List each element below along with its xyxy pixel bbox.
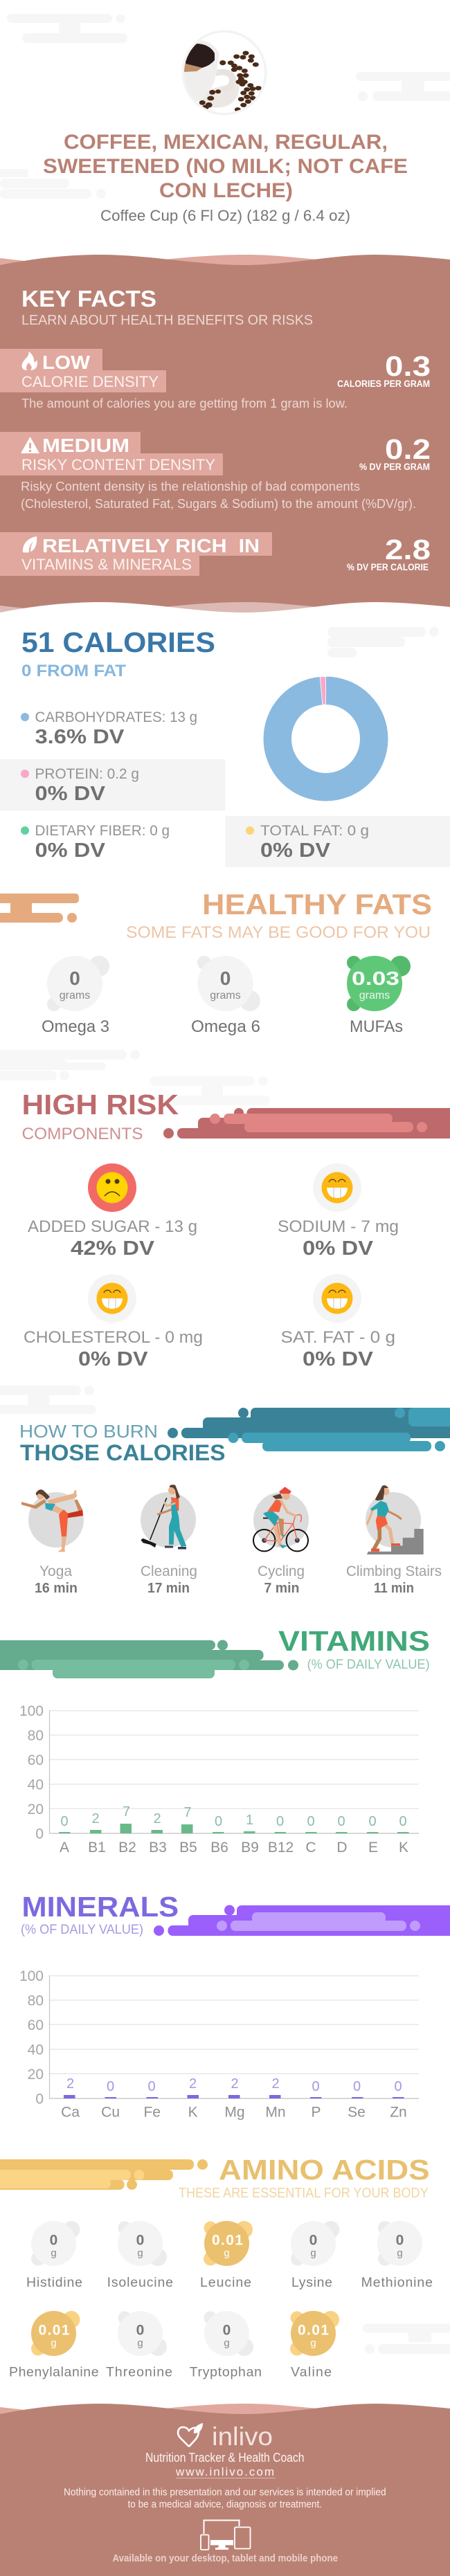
y axis labels: 0 bbox=[35, 1826, 44, 1842]
legend: total fat bbox=[226, 816, 450, 867]
y axis labels: 20 bbox=[28, 1802, 44, 1817]
risk: cholesterol bbox=[24, 1274, 203, 1370]
fat: omega 6: Omega 6 bbox=[191, 1017, 260, 1036]
x axis labels: B12 bbox=[268, 1840, 294, 1856]
amino: isoleucine: Isoleucine bbox=[107, 2275, 173, 2290]
disclaimer: Nothing contained in this presentation and our services is intended or implied bbox=[64, 2486, 386, 2498]
activity: yoga bbox=[21, 1489, 84, 1596]
amino: methionine: 0 bbox=[396, 2233, 404, 2249]
y axis labels: 40 bbox=[28, 1777, 44, 1793]
value labels: 0 bbox=[107, 2079, 114, 2094]
risk: sodium: 0% DV bbox=[303, 1237, 374, 1260]
decorative header shape: healthy fats bbox=[0, 894, 79, 923]
amino: leucine: 0.01 bbox=[212, 2233, 243, 2249]
website link: www.inlivo.com bbox=[175, 2465, 274, 2478]
value labels: 0 bbox=[215, 1814, 222, 1829]
vitamins subheading: (% OF DAILY VALUE) bbox=[307, 1658, 430, 1672]
icon: leaf bbox=[23, 536, 37, 552]
amino: isoleucine: 0 bbox=[136, 2233, 144, 2249]
amino: leucine: Leucine bbox=[200, 2275, 251, 2290]
legend: total fat: 0% DV bbox=[260, 840, 331, 862]
rich label: RELATIVELY RICH IN bbox=[42, 535, 260, 556]
risk: added sugar: ADDED SUGAR - 13 g bbox=[28, 1217, 197, 1236]
fat: omega 3: 0 bbox=[69, 968, 80, 989]
calories heading: 51 CALORIES bbox=[21, 626, 215, 658]
amino: histidine: Histidine bbox=[26, 2275, 82, 2290]
healthy fats subheading: SOME FATS MAY BE GOOD FOR YOU bbox=[126, 923, 431, 942]
amino: lysine bbox=[291, 2221, 339, 2290]
value labels: 0 bbox=[368, 1814, 377, 1829]
x axis labels: B1 bbox=[88, 1840, 106, 1856]
hero: coffee photo in circle bbox=[180, 30, 267, 115]
x axis labels: D bbox=[336, 1840, 348, 1856]
value labels: 0 bbox=[307, 1814, 315, 1829]
x axis labels: B6 bbox=[210, 1840, 228, 1856]
x axis labels: K bbox=[188, 2104, 198, 2121]
amino: tryptophan bbox=[190, 2311, 262, 2380]
activity: cleaning: 17 min bbox=[147, 1581, 190, 1596]
title bbox=[43, 131, 408, 202]
risk: saturated fat: SAT. FAT - 0 g bbox=[281, 1328, 395, 1347]
risk: cholesterol: 0% DV bbox=[78, 1348, 148, 1370]
fat: omega 6: 0 bbox=[220, 968, 231, 989]
value labels: 2 bbox=[271, 2076, 280, 2092]
legend: carbohydrates: 3.6% DV bbox=[35, 726, 125, 748]
title: SWEETENED (NO MILK; NOT CAFE bbox=[43, 155, 408, 178]
background cloud: amino right bbox=[363, 2324, 450, 2354]
icon: warning triangle bbox=[21, 437, 39, 453]
amino: leucine: g bbox=[224, 2247, 230, 2259]
vitamins minerals label: VITAMINS & MINERALS bbox=[21, 556, 192, 573]
decorative header shape: vitamins bbox=[0, 1640, 298, 1678]
fat: MUFAs bbox=[347, 956, 411, 1036]
activity: cycling: 7 min bbox=[264, 1581, 299, 1596]
serving size subtitle: Coffee Cup (6 Fl Oz) (182 g / 6.4 oz) bbox=[100, 207, 350, 224]
amino: isoleucine bbox=[107, 2221, 173, 2290]
vitamins heading: VITAMINS bbox=[278, 1625, 430, 1657]
value 0.3: 0.3 bbox=[385, 350, 431, 382]
x axis labels: Zn bbox=[390, 2104, 407, 2121]
value labels: 2 bbox=[153, 1811, 161, 1826]
low label: LOW bbox=[42, 352, 91, 373]
amino: methionine: Methionine bbox=[361, 2275, 433, 2290]
y axis labels: 100 bbox=[19, 1968, 44, 1984]
fat: omega 6 bbox=[191, 956, 260, 1036]
amino: threonine: Threonine bbox=[106, 2365, 172, 2380]
activity: yoga: Yoga bbox=[39, 1563, 72, 1579]
activity: cycling bbox=[253, 1487, 309, 1596]
amino: lysine: g bbox=[310, 2247, 316, 2259]
description bbox=[21, 480, 416, 511]
value labels: 0 bbox=[312, 2079, 320, 2094]
risk: sodium bbox=[278, 1163, 399, 1260]
amino: valine: Valine bbox=[291, 2365, 332, 2380]
availability note: Available on your desktop, tablet and mobile phone bbox=[112, 2552, 338, 2564]
burn heading line 1: HOW TO BURN bbox=[19, 1421, 158, 1442]
icon: flame bbox=[22, 352, 37, 370]
amino: isoleucine: g bbox=[137, 2247, 143, 2259]
x axis labels: A bbox=[60, 1840, 69, 1856]
legend: carbohydrates: CARBOHYDRATES: 13 g bbox=[35, 709, 197, 725]
y axis labels: 0 bbox=[35, 2092, 44, 2107]
fat: MUFAs: MUFAs bbox=[350, 1017, 403, 1036]
components subheading: COMPONENTS bbox=[22, 1125, 143, 1143]
value labels: 0 bbox=[276, 1814, 284, 1829]
disclaimer bbox=[64, 2486, 386, 2510]
bars bbox=[59, 1824, 408, 1833]
amino: threonine: g bbox=[137, 2337, 143, 2349]
decorative header shape: burn calories bbox=[168, 1408, 450, 1451]
unit: % DV PER GRAM bbox=[359, 462, 430, 472]
key facts heading: KEY FACTS bbox=[21, 286, 156, 311]
x axis labels: Fe bbox=[143, 2104, 161, 2121]
amino: phenylalanine bbox=[9, 2311, 99, 2380]
legend: protein bbox=[0, 759, 226, 810]
x axis labels: Mn bbox=[265, 2104, 286, 2121]
y axis labels: 80 bbox=[28, 1993, 44, 2008]
x axis labels: Ca bbox=[61, 2104, 80, 2121]
panel: key facts bbox=[0, 255, 450, 623]
legend: carbohydrates bbox=[21, 709, 197, 748]
value labels: 2 bbox=[189, 2076, 197, 2092]
footer panel bbox=[0, 2404, 450, 2576]
value labels bbox=[60, 1804, 407, 1829]
risk: saturated fat: 0% DV bbox=[303, 1348, 374, 1370]
value 2.8: 2.8 bbox=[385, 534, 431, 565]
risk: added sugar bbox=[28, 1163, 197, 1260]
high risk heading: HIGH RISK bbox=[22, 1089, 179, 1121]
value labels: 0 bbox=[399, 1814, 407, 1829]
logo: heart and leaf bbox=[178, 2423, 203, 2447]
activity: climbing stairs bbox=[346, 1485, 442, 1596]
description: The amount of calories you are getting from 1 gram is low. bbox=[21, 397, 348, 410]
bar chart: vitamins bbox=[19, 1703, 419, 1856]
amino: threonine bbox=[106, 2311, 172, 2380]
bars bbox=[64, 2095, 404, 2098]
fact: relatively rich in vitamins and minerals bbox=[0, 532, 431, 576]
amino: valine: g bbox=[310, 2337, 316, 2349]
y axis labels: 80 bbox=[28, 1727, 44, 1744]
x axis labels: E bbox=[368, 1840, 378, 1856]
amino: phenylalanine: 0.01 bbox=[39, 2323, 70, 2339]
key facts subheading: LEARN ABOUT HEALTH BENEFITS OR RISKS bbox=[21, 313, 313, 328]
donut chart bbox=[278, 677, 374, 787]
legend: protein: 0% DV bbox=[35, 783, 106, 805]
y axis labels: 40 bbox=[28, 2042, 44, 2058]
value labels: 0 bbox=[60, 1814, 69, 1829]
fat: omega 3 bbox=[42, 956, 109, 1036]
background cloud: high risk centre bbox=[150, 1076, 270, 1105]
amino acids heading: AMINO ACIDS bbox=[219, 2154, 430, 2186]
x axis labels bbox=[61, 2104, 407, 2121]
tagline: Nutrition Tracker & Health Coach bbox=[145, 2451, 305, 2465]
amino: methionine bbox=[361, 2221, 433, 2290]
y axis labels: 60 bbox=[28, 1752, 44, 1768]
activity: climbing stairs: Climbing Stairs bbox=[346, 1563, 442, 1579]
value labels: 2 bbox=[231, 2076, 239, 2092]
x axis labels bbox=[60, 1840, 408, 1856]
decorative header shape: minerals bbox=[154, 1905, 450, 1936]
value labels: 0 bbox=[394, 2079, 402, 2094]
unit: % DV PER CALORIE bbox=[347, 562, 429, 572]
amino: valine bbox=[290, 2311, 339, 2380]
healthy fats heading: HEALTHY FATS bbox=[202, 888, 432, 920]
amino: phenylalanine: g bbox=[51, 2337, 57, 2349]
x axis labels: Cu bbox=[101, 2104, 120, 2121]
value labels: 0 bbox=[147, 2079, 156, 2094]
risky content label: RISKY CONTENT DENSITY bbox=[21, 456, 215, 473]
risk: cholesterol: CHOLESTEROL - 0 mg bbox=[24, 1328, 203, 1347]
fact: low calorie density bbox=[0, 349, 431, 410]
x axis labels: C bbox=[305, 1840, 316, 1856]
decorative header shape: high risk bbox=[163, 1108, 450, 1139]
amino: leucine bbox=[200, 2221, 253, 2290]
y axis labels: 100 bbox=[19, 1703, 44, 1719]
description: Risky Content density is the relationship of bad components bbox=[21, 480, 360, 493]
value labels: 0 bbox=[337, 1814, 345, 1829]
amino: histidine: 0 bbox=[50, 2233, 57, 2249]
fat: MUFAs: grams bbox=[359, 990, 390, 1001]
from fat subheading: 0 FROM FAT bbox=[21, 662, 126, 680]
description: (Cholesterol, Saturated Fat, Sugars & Sodium) to the amount (%DV/gr). bbox=[21, 497, 416, 511]
legend: dietary fiber: DIETARY FIBER: 0 g bbox=[35, 823, 170, 839]
fat: omega 3: grams bbox=[60, 990, 90, 1001]
amino: lysine: Lysine bbox=[291, 2275, 332, 2290]
activity: cycling: Cycling bbox=[258, 1563, 305, 1579]
fat: omega 3: Omega 3 bbox=[42, 1017, 109, 1036]
activity: yoga: 16 min bbox=[35, 1581, 78, 1596]
x axis labels: K bbox=[399, 1840, 408, 1856]
x axis labels: B9 bbox=[241, 1840, 259, 1856]
unit: CALORIES PER GRAM bbox=[337, 379, 430, 389]
activity: cleaning bbox=[141, 1485, 197, 1596]
value labels bbox=[66, 2076, 402, 2094]
activity: cleaning: Cleaning bbox=[141, 1563, 197, 1579]
activity: climbing stairs: 11 min bbox=[374, 1581, 414, 1596]
legend: dietary fiber bbox=[21, 823, 170, 862]
risk: sodium: SODIUM - 7 mg bbox=[278, 1217, 399, 1236]
value labels: 0 bbox=[353, 2079, 361, 2094]
calorie density label: CALORIE DENSITY bbox=[21, 373, 159, 390]
background cloud: calories bbox=[327, 627, 439, 657]
amino: lysine: 0 bbox=[309, 2233, 317, 2249]
risk: saturated fat bbox=[281, 1274, 395, 1370]
amino: tryptophan: Tryptophan bbox=[190, 2365, 262, 2380]
bar chart: minerals bbox=[19, 1968, 419, 2121]
amino: methionine: g bbox=[397, 2247, 403, 2259]
x axis labels: B5 bbox=[179, 1840, 197, 1856]
disclaimer: to be a medical advice, diagnosis or treatment. bbox=[127, 2498, 322, 2510]
logo wordmark: inlivo bbox=[212, 2422, 273, 2451]
icon: devices bbox=[201, 2521, 251, 2550]
fat: MUFAs: 0.03 bbox=[352, 968, 399, 989]
legend: dietary fiber: 0% DV bbox=[35, 840, 106, 862]
amino: tryptophan: 0 bbox=[223, 2323, 231, 2339]
amino: threonine: 0 bbox=[136, 2323, 144, 2339]
value 0.2: 0.2 bbox=[385, 433, 431, 465]
medium label: MEDIUM bbox=[42, 435, 129, 456]
burn heading line 2: THOSE CALORIES bbox=[20, 1440, 226, 1465]
minerals subheading: (% OF DAILY VALUE) bbox=[21, 1923, 143, 1937]
y axis labels: 20 bbox=[28, 2067, 44, 2083]
title: COFFEE, MEXICAN, REGULAR, bbox=[64, 131, 388, 154]
title: CON LECHE) bbox=[159, 179, 293, 202]
x axis labels: P bbox=[311, 2104, 321, 2121]
risk: added sugar: 42% DV bbox=[71, 1237, 155, 1260]
y axis labels bbox=[19, 1703, 44, 1842]
amino: tryptophan: g bbox=[224, 2337, 230, 2349]
x axis labels: Se bbox=[348, 2104, 366, 2121]
amino: histidine: g bbox=[51, 2247, 57, 2259]
fat: omega 6: grams bbox=[210, 990, 241, 1001]
x axis labels: B2 bbox=[118, 1840, 136, 1856]
x axis labels: B3 bbox=[149, 1840, 167, 1856]
decorative header shape: amino acids bbox=[0, 2159, 208, 2190]
background cloud: high risk left bbox=[0, 1050, 140, 1080]
value labels: 7 bbox=[123, 1804, 130, 1820]
minerals heading: MINERALS bbox=[22, 1891, 179, 1923]
background cloud: top left bbox=[7, 14, 127, 43]
legend: total fat: TOTAL FAT: 0 g bbox=[260, 823, 369, 839]
value labels: 1 bbox=[246, 1813, 253, 1828]
background cloud: burn bbox=[0, 1386, 96, 1414]
amino: histidine bbox=[26, 2221, 82, 2290]
amino: valine: 0.01 bbox=[298, 2323, 329, 2339]
y axis labels bbox=[19, 1968, 44, 2107]
background cloud: top right bbox=[356, 72, 450, 101]
value labels: 7 bbox=[183, 1805, 192, 1820]
value labels: 2 bbox=[66, 2076, 74, 2092]
value labels: 2 bbox=[91, 1811, 100, 1826]
fact: medium risky content density bbox=[0, 432, 431, 511]
legend: protein: PROTEIN: 0.2 g bbox=[35, 766, 139, 782]
x axis labels: Mg bbox=[224, 2104, 245, 2121]
y axis labels: 60 bbox=[28, 2017, 44, 2033]
amino: phenylalanine: Phenylalanine bbox=[9, 2365, 99, 2380]
background cloud: title left bbox=[0, 169, 106, 199]
